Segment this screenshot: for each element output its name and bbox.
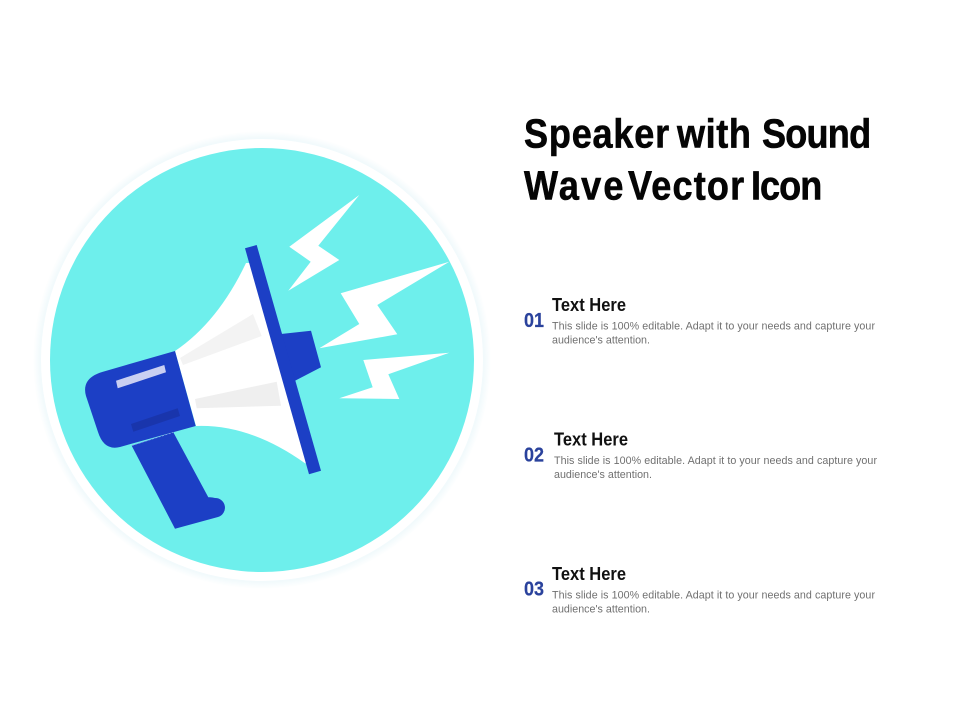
- sound wave bolt 2: [319, 262, 449, 348]
- horn shade lower: [195, 382, 281, 408]
- item 01: This slide is 100% editable. Adapt it to your needs and capture your: [552, 320, 875, 332]
- megaphone horn: [175, 263, 312, 463]
- item 03: This slide is 100% editable. Adapt it to your needs and capture your: [552, 590, 875, 602]
- item 01: audience's attention.: [552, 334, 650, 346]
- megaphone handle: [132, 432, 225, 529]
- item 02: This slide is 100% editable. Adapt it to your needs and capture your: [554, 455, 877, 467]
- horn shade upper: [180, 314, 262, 365]
- title: [524, 111, 871, 209]
- title: Icon: [751, 163, 822, 209]
- sound wave bolt 3: [339, 353, 449, 399]
- title: with: [676, 111, 751, 157]
- item 02: Text Here: [554, 428, 628, 450]
- megaphone rim cap: [281, 331, 321, 381]
- icon: speaker in circle: [33, 131, 491, 589]
- title: Speaker: [524, 111, 669, 157]
- body dark slot: [131, 408, 180, 432]
- megaphone body: [85, 351, 196, 448]
- megaphone rim bar: [245, 245, 321, 474]
- item 03: audience's attention.: [552, 604, 650, 616]
- title: Vector: [628, 163, 744, 209]
- circle halo: [33, 131, 491, 589]
- item 02: 02: [524, 444, 544, 466]
- handle seam: [132, 432, 173, 446]
- sound wave bolt 1: [288, 195, 359, 291]
- item 01: [524, 294, 875, 346]
- body highlight: [116, 365, 166, 388]
- item 02: [524, 428, 877, 481]
- turquoise circle: [50, 148, 474, 572]
- item 03: Text Here: [552, 563, 626, 584]
- item 03: 03: [524, 578, 544, 600]
- title: Sound: [762, 111, 871, 157]
- title: Wave: [524, 163, 623, 209]
- item 01: 01: [524, 310, 544, 332]
- white ring: [41, 139, 483, 581]
- item 03: [524, 563, 875, 616]
- item 01: Text Here: [552, 294, 626, 315]
- item 02: audience's attention.: [554, 469, 652, 481]
